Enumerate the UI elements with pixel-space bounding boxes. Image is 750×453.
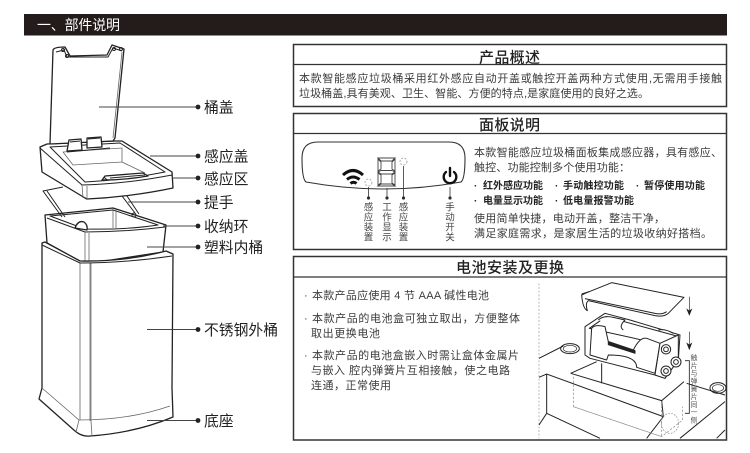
battery instructions: · — [304, 350, 308, 362]
label: storage ring — [163, 218, 248, 236]
label: stainless steel outer bucket: 不锈钢外桶 — [204, 322, 278, 339]
label: bin lid: 桶盖 — [204, 100, 234, 116]
vertical note: contact and spring on same side: 一 — [691, 410, 698, 417]
panel: product overview — [294, 44, 726, 106]
panel: battery installation — [294, 256, 726, 440]
section title bar — [24, 14, 727, 36]
icon: seven segment display — [378, 158, 395, 186]
vertical note: contact and spring on same side: 侧 — [691, 415, 698, 424]
vertical label: sensor device left: 应 — [364, 212, 374, 224]
vertical note: contact and spring on same side: 同 — [691, 401, 698, 409]
vertical label: manual switch: 开 — [445, 222, 455, 234]
heading: battery installation: 电池安装及更换 — [456, 260, 564, 276]
panel: control panel description — [294, 114, 726, 250]
battery illustration — [539, 283, 726, 438]
heading: product overview: 产品概述 — [479, 50, 540, 66]
function list: 电量显示功能 — [483, 194, 543, 207]
vertical label: sensor device left: 装 — [364, 222, 374, 234]
battery instructions: 本款产品的电池盒嵌入时需让盒体金属片 — [312, 348, 519, 362]
battery instructions: 取出更换电池 — [311, 326, 380, 340]
icon: wifi sensor — [343, 170, 363, 184]
label: sensor cover: 感应盖 — [204, 148, 249, 166]
vertical label: sensor device right: 应 — [399, 212, 409, 224]
function list: · — [555, 196, 558, 207]
label: handle: 提手 — [204, 194, 234, 212]
panel outline — [302, 142, 465, 189]
battery holder — [585, 313, 681, 378]
label: plastic inner bucket: 塑料内桶 — [204, 240, 263, 256]
function list: 低电量报警功能 — [563, 194, 634, 207]
overview text: 垃圾桶盖,具有美观、卫生、智能、方便的特点,是家庭使用的良好之选。 — [299, 86, 649, 100]
label: bin lid — [99, 100, 234, 116]
battery instructions: 连通，正常使用 — [311, 379, 391, 392]
trash can exploded illustration — [39, 45, 173, 436]
bracket — [685, 361, 689, 413]
panel closing text: 使用简单快捷，电动开盖，整洁干净， — [474, 211, 665, 225]
label: storage ring: 收纳环 — [204, 218, 248, 236]
panel closing text: 满足家庭需求，是家居生活的垃圾收纳好搭档。 — [474, 226, 712, 240]
battery instructions: 本款产品应使用 4 节 AAA 碱性电池 — [312, 288, 489, 302]
label: sensor area: 感应区 — [204, 170, 249, 188]
handle — [43, 187, 139, 217]
label: handle — [128, 194, 234, 212]
label: plastic inner bucket — [147, 240, 263, 256]
icon: power button — [444, 168, 456, 183]
label: sensor area — [172, 170, 249, 188]
function list — [474, 179, 705, 207]
vertical label: working display: 工 — [382, 202, 392, 214]
bin lid — [50, 45, 124, 152]
vertical note: contact and spring on same side: 触 — [691, 353, 698, 362]
vertical note: contact and spring on same side: 弹 — [691, 376, 698, 385]
sensor cover — [40, 141, 173, 199]
panel intro text: 触控、功能控制多个使用功能： — [474, 160, 630, 174]
arrows down — [687, 297, 692, 349]
label: base: 底座 — [204, 413, 234, 430]
panel closing text — [474, 211, 712, 240]
function list: · — [474, 196, 477, 207]
heading: control panel: 面板说明 — [479, 117, 540, 134]
label: stainless steel outer bucket — [147, 322, 278, 339]
panel intro text — [474, 145, 722, 174]
vertical label: working display: 示 — [382, 232, 392, 244]
bin cavity — [539, 344, 726, 438]
battery cover — [582, 283, 684, 316]
vertical note: contact and spring on same side: 与 — [691, 370, 698, 378]
vertical label: sensor device right: 感 — [399, 202, 409, 214]
function list: 红外感应功能 — [483, 179, 543, 192]
function list: · — [636, 181, 639, 192]
outer stainless steel bucket — [39, 242, 173, 436]
battery instructions: · — [304, 313, 308, 325]
vertical label: sensor device left: 感 — [364, 202, 374, 214]
vertical label: working display: 作 — [382, 212, 392, 224]
vertical note: contact and spring on same side: 簧 — [691, 384, 698, 393]
label: sensor cover — [150, 148, 249, 166]
vertical label: manual switch: 动 — [445, 212, 455, 224]
battery instructions: · — [304, 290, 308, 302]
function list: · — [555, 181, 558, 192]
function list: 手动触控功能 — [563, 179, 624, 192]
function list: 暂停使用功能 — [644, 179, 705, 192]
vertical label: working display: 显 — [382, 222, 392, 234]
battery instructions — [304, 288, 520, 392]
panel intro text: 本款智能感应垃圾桶面板集成感应器，具有感应、 — [474, 145, 722, 159]
vertical label: sensor device right: 装 — [399, 222, 409, 234]
section title bar: 一、部件说明 — [37, 17, 120, 33]
vertical label: sensor device right: 置 — [399, 232, 408, 244]
vertical note: contact and spring on same side: 片 — [691, 392, 698, 401]
battery instructions: 本款产品的电池盒可独立取出，方便整体 — [312, 311, 520, 325]
plastic inner bucket — [45, 208, 166, 264]
vertical label: manual switch: 手 — [445, 202, 455, 214]
overview text — [299, 71, 722, 100]
function list: · — [474, 181, 477, 192]
vertical label: manual switch: 关 — [445, 232, 455, 244]
battery instructions: 与嵌入 腔内弹簧片互相接触，使之电路 — [311, 363, 510, 377]
leader lines — [367, 166, 451, 199]
vertical label: sensor device left: 置 — [364, 232, 373, 244]
control panel diagram — [302, 142, 465, 244]
overview text: 本款智能感应垃圾桶采用红外感应自动开盖或触控开盖两种方式使用,无需用手接触 — [299, 71, 722, 85]
vertical note: contact and spring on same side: 片 — [691, 361, 698, 370]
part labels with leader lines — [99, 100, 278, 430]
label: base — [147, 413, 234, 430]
